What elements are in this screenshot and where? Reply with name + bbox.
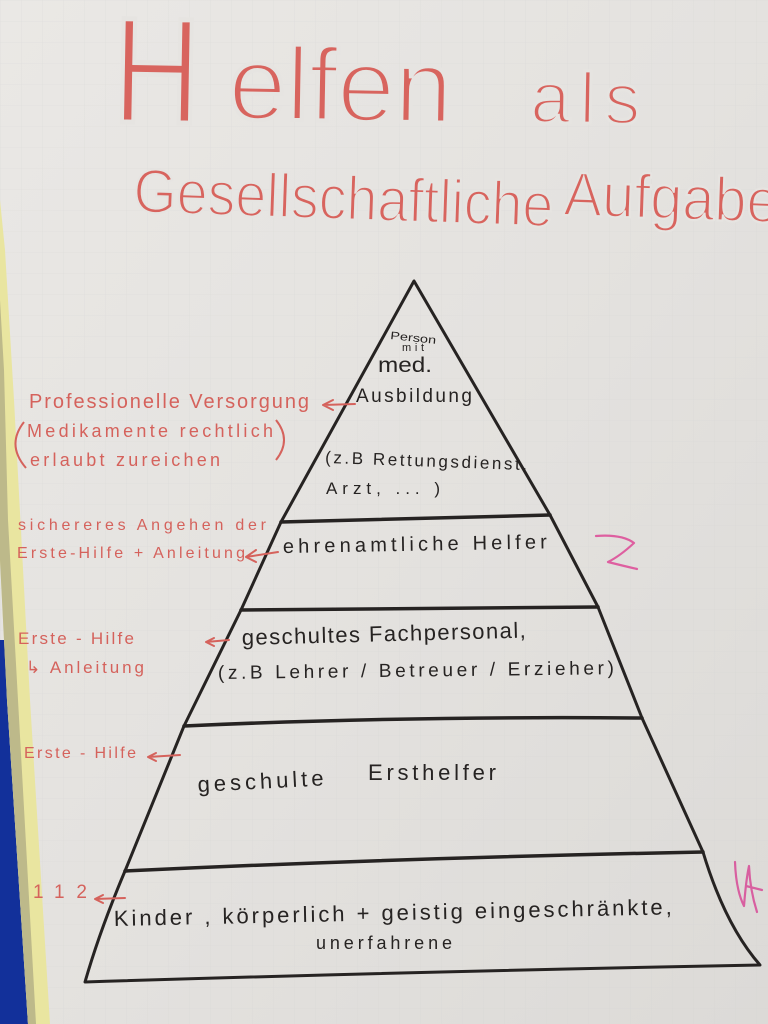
subtitle [132,145,768,248]
tier 1 label [325,330,527,498]
pink mark: lower [735,862,762,912]
tier 1 label: med. [378,354,432,377]
tier 3 label: geschultes Fachpersonal, [241,618,526,650]
pink mark: upper [596,536,637,569]
annotation: professional care: Medikamente rechtlich [27,421,273,441]
tier 3 label [218,618,614,684]
annotation: emergency number: 112 [33,882,87,903]
annotation: first aid and instruction: ↳ Anleitung [26,658,144,677]
annotation: first aid and instruction [18,629,144,677]
annotation: safe approach: sichereres Angehen der [18,517,267,534]
tier 4 label [197,760,496,797]
annotation: first aid: Erste - Hilfe [24,745,136,762]
yellow tape [0,200,50,1024]
title [111,0,642,163]
tier 4 label: geschulte [197,765,324,797]
tier 2 label: ehrenamtliche Helfer [283,531,547,558]
tier 5 label [114,894,672,953]
tier 1 label: Arzt, ... ) [326,479,440,498]
tier 5 label: unerfahrene [316,933,452,953]
annotation: professional care [15,391,309,470]
annotation: safe approach: Erste-Hilfe + Anleitung [17,545,245,562]
red arrows [95,400,355,903]
tier 3 label: (z.B Lehrer / Betreuer / Erzieher) [218,658,614,684]
annotation: professional care: erlaubt zureichen [30,450,220,470]
tier 1 label: (z.B Rettungsdienst, [325,448,527,474]
tier 1 label: Person [390,330,437,347]
annotation: safe approach [17,517,267,562]
subtitle: Gesellschaftliche [132,157,555,241]
blue board edge [0,640,28,1024]
title: elfen [228,26,454,146]
tier dividers [125,515,703,871]
tier 1 label: Ausbildung [356,386,472,407]
tier 5 label: Kinder , körperlich + geistig eingeschränkte, [114,894,672,931]
annotation: professional care: Professionelle Versorgung [29,391,309,413]
tier 4 label: Ersthelfer [368,760,496,785]
title: als [530,58,641,140]
annotation: first aid and instruction: Erste - Hilfe [18,629,134,648]
tier 1 label: mit [402,342,424,354]
pyramid [85,281,760,982]
